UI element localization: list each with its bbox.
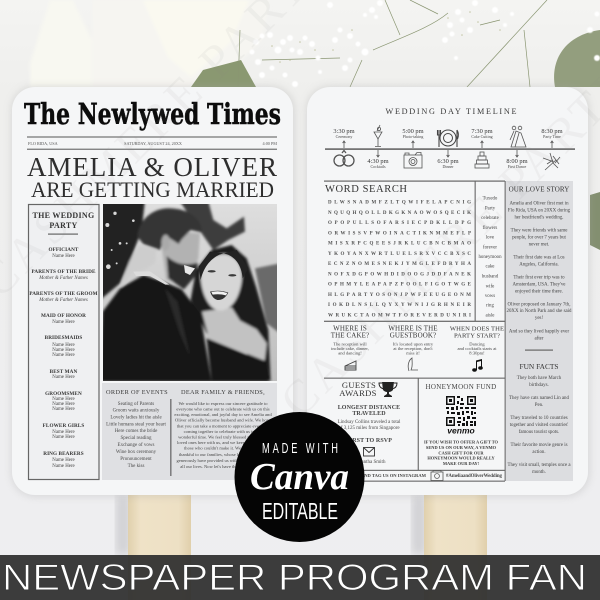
panel: the wedding party: Name Here — [52, 402, 75, 407]
timeline labels: Cake Cutting — [471, 134, 493, 139]
panel: guests awards: of 3,125 miles from Singapore — [338, 426, 400, 431]
when does the party start — [450, 326, 504, 372]
dateline strip: 4:00 PM — [262, 141, 277, 146]
where is the cake: The reception will — [333, 342, 367, 346]
icon: sparkler — [543, 153, 560, 170]
word list: wife — [486, 284, 494, 289]
word list: honeymoon — [478, 255, 502, 260]
order of events: Wine box ceremony — [116, 450, 157, 455]
where is the cake — [331, 324, 369, 370]
icon: cocktail — [374, 125, 382, 146]
dear family letter: generously have provided us with so much through — [176, 458, 270, 463]
panel: guests awards: GUESTS — [342, 380, 376, 390]
where is the guestbook — [388, 324, 438, 371]
panel: guests awards: Lindsay Collins traveled a total — [338, 420, 401, 425]
fun facts: They traveled to 10 countries — [510, 416, 568, 421]
badge: made with canva editable: MADE WITH — [262, 440, 338, 457]
love story: Their first ever trip was to — [513, 275, 565, 280]
paddle sticks — [116, 490, 487, 600]
where is the cake: and dancing! — [338, 350, 362, 356]
word list: celebrate — [481, 216, 499, 221]
panel: guests awards: Samantha Smith — [353, 460, 386, 465]
word search grid: YKOYANXWRTLUELSRXVCCBXSC — [328, 252, 471, 257]
love story — [507, 186, 572, 342]
panel: honeymoon fund: MAKE OUR DAY! — [443, 461, 480, 466]
icon: feather pen — [408, 358, 418, 371]
when does the party start: WHEN DOES THE — [450, 326, 504, 332]
icon: dancing couple — [510, 126, 526, 147]
where is the guestbook: It's located upon entry — [393, 342, 434, 346]
love story: never met. — [529, 242, 549, 247]
word list: forever — [483, 245, 497, 250]
timeline labels: 8:30 pm — [541, 128, 563, 135]
fun facts: They both have March — [517, 376, 562, 381]
dear family letter — [174, 389, 272, 469]
timeline labels: Party Time — [543, 134, 561, 139]
headline subtitle: ARE GETTING MARRIED — [31, 177, 274, 202]
order of events: Special reading — [121, 436, 152, 441]
love story: They were friends with same — [511, 228, 567, 234]
dear family letter: We would like to express our sincere gratitude to — [178, 401, 268, 406]
watermark — [0, 0, 600, 428]
panel: the wedding party: Name Here — [52, 353, 75, 358]
love story: people, for over 7 years but — [512, 236, 567, 240]
panel: the wedding party: Name Here — [52, 435, 75, 440]
word list: Party — [485, 206, 496, 211]
love story: Amelia and Oliver first met in — [509, 202, 569, 206]
panel: the wedding party: Mother & Father Names — [38, 276, 88, 281]
QR code — [446, 396, 476, 426]
panel: guests awards: TRAVELED — [352, 411, 386, 417]
where is the guestbook: GUESTBOOK? — [390, 332, 436, 340]
fun facts: birthdays. — [529, 383, 549, 388]
instagram strip — [324, 470, 503, 480]
panel: the wedding party: FLOWER GIRLS — [43, 423, 84, 429]
panel: the wedding party: Name Here — [52, 458, 75, 463]
order of events: The kiss — [128, 464, 144, 469]
word search grid: ECNZNOMESNEKJYMGLEFDRYHA — [328, 262, 471, 267]
love story: Flo Rida, USA on 20XX during — [508, 208, 571, 213]
love story: Their first date was at Los — [513, 256, 565, 260]
dateline strip — [27, 136, 277, 150]
fun facts: They visit small, temples once a — [507, 463, 571, 468]
icon: instagram camera — [431, 470, 443, 480]
when does the party start: Dancing — [469, 342, 485, 346]
headline names: AMELIA & OLIVER — [27, 152, 277, 182]
word search grid: OPHMYLEAPAPZPOOLFIGOTWGE — [328, 283, 472, 288]
panel: the wedding party: PARTY — [49, 221, 78, 230]
panel: the wedding party: PARENTS OF THE BRIDE — [31, 269, 96, 275]
fun facts: month. — [532, 470, 546, 475]
panel: the wedding party: Name Here — [52, 375, 75, 380]
word list: husband — [482, 274, 499, 279]
badge: made with canva editable: Canva — [250, 456, 349, 498]
order of events: ORDER OF EVENTS — [106, 389, 168, 396]
dateline strip: FLO RIDA, USA — [28, 141, 58, 147]
fun facts: famous tourist spots. — [519, 430, 559, 435]
dear family letter: exciting, emotional, and joyful day to see Amelia and — [174, 412, 272, 418]
word list: vows — [485, 294, 495, 299]
timeline — [325, 125, 575, 170]
love story: her bestfriend's wedding. — [514, 215, 564, 220]
word search grid: MISXRPCQEESJRKLUCBNCBMAO — [328, 242, 471, 247]
instagram strip: SHARE PHOTOS AND TAG US ON INSTAGRAM — [324, 473, 427, 478]
left fan card — [11, 86, 295, 497]
where is the cake: WHERE IS — [333, 324, 367, 332]
timeline labels: 5:00 pm — [402, 128, 424, 135]
dear family letter: loved ones here with us, and we keep in our hearts — [177, 440, 269, 446]
panel: our love story and fun facts — [506, 181, 573, 481]
love story: And so they lived happily ever — [509, 329, 569, 334]
badge: made with canva editable — [234, 412, 364, 542]
panel: the wedding party: THE WEDDING — [32, 211, 95, 220]
where is the guestbook: at the reception, don't — [393, 346, 433, 352]
dear family letter: that you can take a moment to appreciate everyone — [177, 424, 269, 428]
panel: the wedding party: Name Here — [52, 348, 75, 353]
where is the cake: include cake, dinner, — [331, 346, 369, 352]
word search grid: DLWSNADMFZLTQWIFELAPCNIG — [328, 201, 471, 206]
fun facts: Their favorite movie genre is — [510, 443, 568, 448]
word search grid: NQUQHQOLLDKGKNAOWOSQECIK — [328, 211, 471, 216]
panel: the wedding party: Name Here — [52, 397, 75, 402]
timeline labels: Photo-taking — [403, 134, 423, 139]
order of events: Lovely ladies hit the aisle — [110, 416, 162, 420]
where is the guestbook: miss it! — [406, 350, 420, 356]
love story: OUR LOVE STORY — [509, 186, 569, 194]
word search grid: NOFXDGPOWHDIDOOGJDDFANEK — [328, 272, 471, 277]
word list: Tuxedo — [483, 196, 498, 202]
word search rules — [324, 180, 506, 482]
icon: envelope — [364, 448, 374, 456]
panel: guests awards: FIRST TO RSVP — [346, 438, 392, 444]
right fan card — [306, 86, 590, 497]
word list: flowers — [483, 226, 497, 231]
timeline labels — [333, 128, 563, 169]
word search grid: WRUKCTAOMWTFOREVERDUNIRI — [328, 313, 471, 318]
couple photo — [100, 200, 280, 382]
panel: the wedding party: GROOMSMEN — [45, 391, 82, 397]
venmo wordmark: venmo — [447, 426, 475, 436]
when does the party start: PARTY START? — [454, 332, 500, 340]
fun facts — [507, 362, 571, 475]
panel: the wedding party: BRIDESMAIDS — [45, 335, 82, 341]
order of events: Pronouncement — [120, 457, 152, 462]
order of events: Here comes the bride — [115, 429, 158, 434]
panel: honeymoon fund — [424, 383, 499, 466]
timeline arrows — [343, 141, 553, 157]
fun facts: action. — [532, 450, 546, 455]
panel: the wedding party: Name Here — [52, 464, 75, 469]
panel: order of events and letter — [102, 383, 277, 480]
word list: ring — [486, 304, 494, 309]
panel: guests awards: LONGEST DISTANCE — [338, 405, 400, 411]
love story: after — [535, 336, 544, 342]
panel: the wedding party: Name Here — [52, 430, 75, 435]
order of events: Seating of Parents — [118, 402, 154, 407]
dear family letter: Oliver officially become husband and wife. We hope — [175, 418, 271, 422]
order of events: Groom waits anxiously — [113, 408, 160, 414]
panel: the wedding party — [28, 204, 99, 480]
panel: the wedding party: Name Here — [52, 320, 75, 325]
word list — [478, 196, 502, 318]
timeline labels: 3:30 pm — [333, 128, 355, 135]
order of events — [106, 389, 168, 469]
fun facts: FUN FACTS — [519, 362, 559, 371]
panel: the wedding party: MAID OF HONOR — [41, 313, 86, 319]
panel: guests awards: AWARDS — [339, 388, 377, 398]
panel: the wedding party: RING BEARERS — [43, 451, 84, 457]
timeline labels: 6:30 pm — [437, 158, 459, 165]
badge: made with canva editable: EDITABLE — [262, 498, 338, 524]
icon: camera — [404, 152, 422, 168]
bottom banner: NEWSPAPER PROGRAM FAN — [2, 557, 587, 598]
flowers and foliage — [30, 0, 600, 250]
timeline labels: Dinner — [442, 164, 454, 169]
icon: trophy — [379, 382, 397, 397]
word list: love — [486, 236, 494, 241]
timeline labels: First Dance — [508, 164, 526, 169]
word search grid: IOKDLNSLLQYXYWNIJGRHNEIR — [328, 303, 471, 308]
fun facts: together and visited countries' — [510, 423, 568, 428]
panel: honeymoon fund: CASH GIFT FOR OUR — [438, 450, 484, 456]
panel: the wedding party: Name Here — [52, 254, 75, 259]
timeline labels: 8:00 pm — [506, 158, 528, 165]
word list: aisle — [486, 314, 494, 318]
timeline title: WEDDING DAY TIMELINE — [386, 107, 516, 116]
when does the party start: and cocktails starts at — [457, 346, 497, 351]
love story: Amsterdam, USA. They've — [513, 282, 565, 287]
love story: Angeles, California. — [519, 262, 559, 268]
timeline labels: 7:30 pm — [471, 128, 493, 135]
fun facts: Pen. — [535, 403, 543, 408]
panel: honeymoon fund: HONEYMOON WOULD REALLY — [427, 456, 495, 461]
panel: the wedding party: OFFICIANT — [48, 247, 79, 253]
icon: plate and cutlery — [438, 130, 458, 147]
masthead title: The Newlywed Times — [24, 97, 281, 131]
order of events: Exchange of vows — [118, 443, 155, 448]
dateline strip: SATURDAY, AUGUST 24, 20XX — [124, 141, 182, 147]
dear family letter: coming together to celebrate with us in this — [184, 429, 263, 434]
panel: guests awards — [338, 380, 401, 465]
dear family letter: thankful to our families, whose love and support — [179, 452, 268, 458]
where is the guestbook: WHERE IS THE — [388, 324, 438, 332]
panel: the wedding party: Mother & Father Names — [38, 298, 88, 303]
icon: rings — [334, 150, 354, 166]
dear family letter: those who couldn't make it. We are forever — [184, 446, 262, 450]
panel: the wedding party: Name Here — [52, 343, 75, 348]
dear family letter: all our lives. Now let's have the best time ever! — [180, 464, 266, 469]
word search grid: HLGPARTYOSONJPWFEEUGEONM — [328, 293, 471, 298]
word list: cake — [486, 265, 494, 270]
instagram strip: #AmeliaandOliverWedding — [446, 474, 503, 479]
love story: Oliver proposed on January 7th, — [508, 302, 570, 307]
where is the cake: THE CAKE? — [331, 332, 369, 340]
timeline labels: 4:30 pm — [367, 158, 389, 165]
icon: music note — [472, 359, 483, 372]
panel: honeymoon fund: IF YOU WISH TO OFFER A GIFT TO — [424, 440, 499, 444]
panel: honeymoon fund: SEND US ON OUR WAY, A VENMO — [426, 445, 497, 450]
love story: 20XX in North Park and she said — [507, 309, 572, 314]
word search grid: ORWISSVPWOINACTIKNMMEFLP — [328, 231, 471, 236]
panel: the wedding party: Name Here — [52, 407, 75, 412]
word search heading: WORD SEARCH — [325, 184, 407, 195]
love story: enjoyed their time there. — [515, 289, 563, 294]
dear family letter: wonderful time. We feel truly blessed to have our — [178, 434, 268, 440]
timeline labels: Ceremony — [336, 134, 352, 139]
order of events: Little humans steal your heart — [106, 422, 166, 428]
fun facts: They have cats named Lin and — [509, 396, 569, 401]
timeline labels: Cocktails — [370, 164, 386, 169]
when does the party start: 8:30pm! — [469, 350, 485, 356]
panel: honeymoon fund: HONEYMOON FUND — [426, 383, 496, 391]
dear family letter: everyone who came out to celebrate with us on this — [176, 406, 270, 412]
dear family letter: DEAR FAMILY & FRIENDS, — [181, 389, 265, 396]
word search grid: OPOPULLSOFARSIECPDKLLDPG — [328, 221, 471, 226]
love story: yes! — [535, 316, 543, 321]
icon: cake slice — [345, 361, 356, 370]
word search grid — [328, 201, 472, 318]
icon: wedding cake — [475, 152, 489, 168]
panel: the wedding party: BEST MAN — [50, 369, 77, 375]
panel: the wedding party: PARENTS OF THE GROOM — [29, 291, 98, 297]
